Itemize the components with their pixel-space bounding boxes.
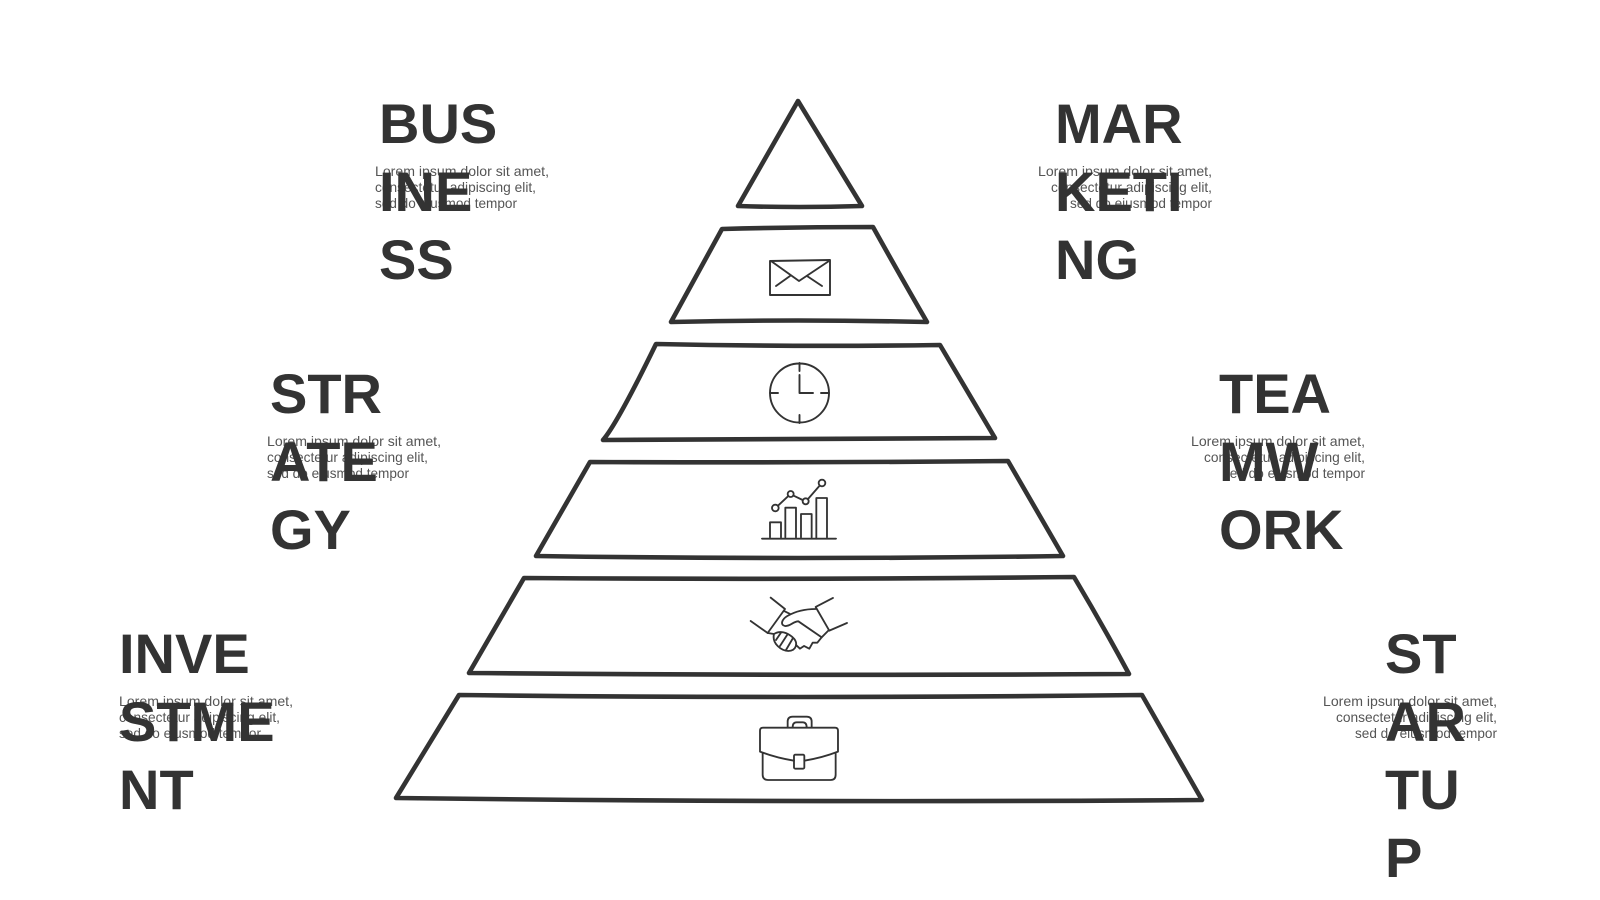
startup description: Lorem ipsum dolor sit amet, bbox=[1323, 693, 1497, 709]
strategy description bbox=[267, 433, 441, 481]
business description: Lorem ipsum dolor sit amet, bbox=[375, 163, 549, 179]
marketing description: consectetur adipiscing elit, bbox=[1051, 179, 1212, 195]
icon: briefcase bbox=[760, 717, 838, 780]
marketing description bbox=[1038, 163, 1212, 211]
teamwork description bbox=[1191, 433, 1365, 481]
investment description: consectetur adipiscing elit, bbox=[119, 709, 280, 725]
teamwork heading: ORK bbox=[1219, 498, 1343, 561]
strategy heading: ATE bbox=[270, 430, 378, 493]
startup description: sed do eiusmod tempor bbox=[1355, 725, 1497, 741]
marketing description: Lorem ipsum dolor sit amet, bbox=[1038, 163, 1212, 179]
strategy heading: STR bbox=[270, 362, 382, 425]
startup heading: AR bbox=[1385, 690, 1466, 753]
business heading: BUS bbox=[379, 92, 497, 155]
marketing heading: NG bbox=[1055, 228, 1139, 291]
pyramid tier 3 bbox=[603, 344, 995, 440]
strategy heading bbox=[270, 362, 382, 561]
teamwork heading bbox=[1219, 362, 1343, 561]
startup description: consectetur adipiscing elit, bbox=[1336, 709, 1497, 725]
investment heading: STME bbox=[119, 690, 275, 753]
pyramid tier 4 bbox=[536, 461, 1063, 558]
strategy heading: GY bbox=[270, 498, 351, 561]
business description: consectetur adipiscing elit, bbox=[375, 179, 536, 195]
investment heading bbox=[119, 622, 275, 821]
pyramid bbox=[396, 101, 1202, 801]
marketing heading bbox=[1055, 92, 1183, 291]
investment description bbox=[119, 693, 293, 741]
text block: business bbox=[375, 92, 549, 291]
investment heading: NT bbox=[119, 758, 194, 821]
strategy description: consectetur adipiscing elit, bbox=[267, 449, 428, 465]
icon: handshake bbox=[751, 598, 847, 651]
startup heading: TU bbox=[1385, 758, 1460, 821]
teamwork heading: TEA bbox=[1219, 362, 1331, 425]
text block: strategy bbox=[267, 362, 441, 561]
pyramid tier 6 bbox=[396, 695, 1202, 801]
investment description: sed do eiusmod tempor bbox=[119, 725, 261, 741]
icon: envelope bbox=[770, 260, 830, 295]
icon: clock bbox=[770, 363, 829, 423]
startup heading: ST bbox=[1385, 622, 1457, 685]
business heading: INE bbox=[379, 160, 472, 223]
teamwork description: consectetur adipiscing elit, bbox=[1204, 449, 1365, 465]
teamwork description: Lorem ipsum dolor sit amet, bbox=[1191, 433, 1365, 449]
teamwork heading: MW bbox=[1219, 430, 1319, 493]
text block: teamwork bbox=[1191, 362, 1365, 561]
pyramid tier 2 bbox=[671, 227, 927, 322]
startup description bbox=[1323, 693, 1497, 741]
text block: investment bbox=[119, 622, 293, 821]
strategy description: Lorem ipsum dolor sit amet, bbox=[267, 433, 441, 449]
pyramid tier 5 bbox=[469, 577, 1129, 675]
icon: bar chart bbox=[762, 480, 836, 539]
startup heading: P bbox=[1385, 826, 1422, 889]
business description bbox=[375, 163, 549, 211]
business heading: SS bbox=[379, 228, 454, 291]
investment heading: INVE bbox=[119, 622, 250, 685]
teamwork description: sed do eiusmod tempor bbox=[1223, 465, 1365, 481]
marketing heading: MAR bbox=[1055, 92, 1183, 155]
startup heading bbox=[1385, 622, 1466, 889]
business description: sed do eiusmod tempor bbox=[375, 195, 517, 211]
pyramid tier 1: apex bbox=[738, 101, 862, 207]
text block: startup bbox=[1323, 622, 1497, 889]
marketing description: sed do eiusmod tempor bbox=[1070, 195, 1212, 211]
strategy description: sed do eiusmod tempor bbox=[267, 465, 409, 481]
text block: marketing bbox=[1038, 92, 1212, 291]
business heading bbox=[379, 92, 497, 291]
marketing heading: KETI bbox=[1055, 160, 1183, 223]
investment description: Lorem ipsum dolor sit amet, bbox=[119, 693, 293, 709]
